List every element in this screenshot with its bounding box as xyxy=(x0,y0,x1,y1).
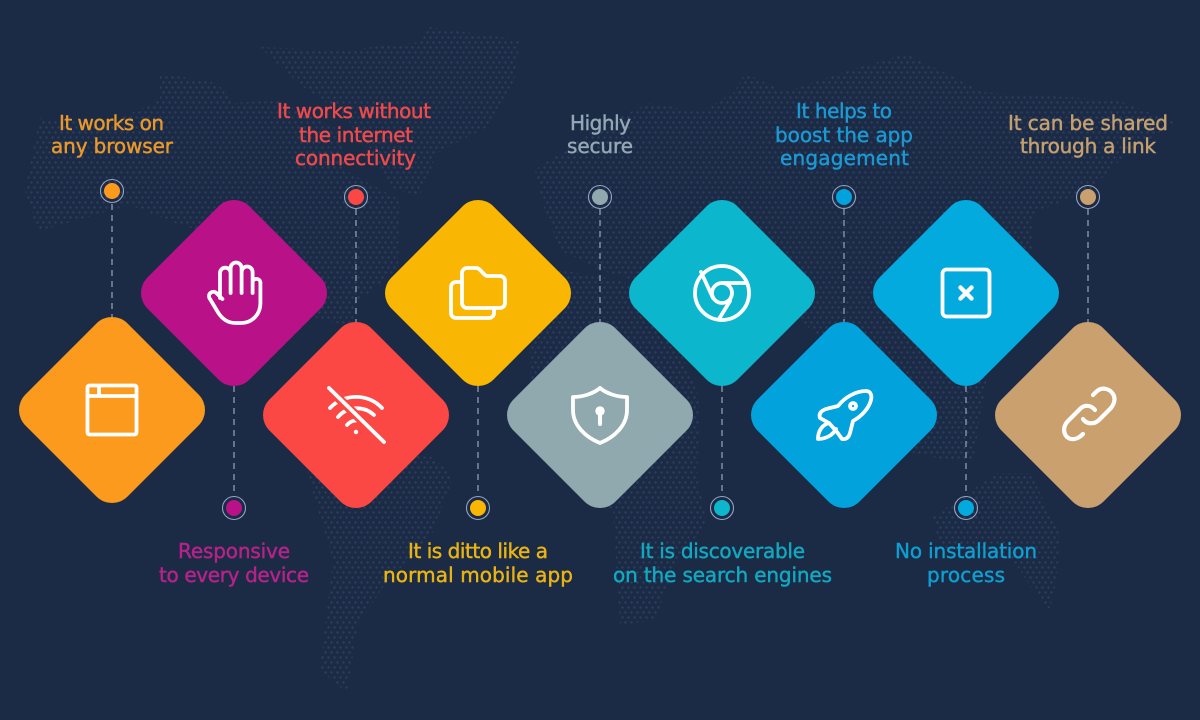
label: highly secure: Highly xyxy=(570,111,631,135)
label: it is ditto like a normal mobile app: normal mobile app xyxy=(383,563,573,587)
label: it helps to boost the app engagement: engagement xyxy=(780,146,909,170)
icon: browser window xyxy=(88,386,136,434)
diamond: blue rocket xyxy=(742,313,946,517)
Australia xyxy=(933,473,1060,610)
label: it works on any browser xyxy=(51,111,174,158)
South America xyxy=(300,440,453,693)
label: it helps to boost the app engagement: boost the app xyxy=(775,123,913,147)
icon: chain link xyxy=(1064,389,1114,439)
marker: red xyxy=(344,186,368,208)
icon: rocket xyxy=(818,391,871,439)
label: responsive to every device xyxy=(159,539,309,587)
diamond: yellow folders xyxy=(376,191,580,395)
label: it works without the internet connectivity: It works without xyxy=(277,99,431,123)
label: no installation process: process xyxy=(927,563,1005,587)
marker: tan xyxy=(1076,186,1100,208)
label: it works without the internet connectivity: the internet xyxy=(299,123,413,147)
connector: dashed lines xyxy=(112,204,1088,497)
label: it is ditto like a normal mobile app xyxy=(383,539,573,587)
icon: chrome logo xyxy=(695,266,749,320)
marker: cyan xyxy=(954,496,978,520)
Africa xyxy=(530,270,707,625)
label: no installation process: No installation xyxy=(895,539,1037,563)
Eurasia xyxy=(535,54,1174,460)
diamond: orange browser xyxy=(10,308,214,512)
marker: yellow xyxy=(466,496,490,520)
label: highly secure: secure xyxy=(567,134,633,158)
icon: wifi off xyxy=(328,388,384,442)
diamond: grey shield xyxy=(498,313,702,517)
marker: blue xyxy=(832,186,856,208)
diamond: teal chrome xyxy=(620,191,824,395)
diamond: tan link xyxy=(986,313,1190,517)
icon: shield with keyhole xyxy=(573,388,627,443)
icon: hand xyxy=(209,263,260,323)
marker: teal xyxy=(710,496,734,520)
icon: close box xyxy=(942,270,990,316)
marker: magenta xyxy=(222,496,246,520)
label: it works on any browser: any browser xyxy=(51,134,174,158)
label: it can be shared through a link: It can be shared xyxy=(1008,111,1168,135)
label: responsive to every device: Responsive xyxy=(178,539,290,563)
diamond: magenta hand xyxy=(132,191,336,395)
label: it works without the internet connectivity: connectivity xyxy=(295,146,416,170)
label: no installation process xyxy=(895,539,1037,587)
label: it helps to boost the app engagement: It helps to xyxy=(796,99,892,123)
diamond: cyan no install xyxy=(864,191,1068,395)
label: responsive to every device: to every device xyxy=(159,563,309,587)
label: it is discoverable on the search engines: It is discoverable xyxy=(640,539,805,563)
label: it can be shared through a link: through a link xyxy=(1020,134,1156,158)
label: it is discoverable on the search engines: on the search engines xyxy=(613,563,832,587)
marker: orange xyxy=(100,180,124,202)
Greenland xyxy=(260,27,520,195)
North America xyxy=(25,73,400,325)
label: it is discoverable on the search engines xyxy=(613,539,832,587)
marker: grey xyxy=(588,186,612,208)
diamond: red no wifi xyxy=(254,313,458,517)
label: it works on any browser: It works on xyxy=(59,111,164,135)
label: it works without the internet connectivity xyxy=(277,99,431,170)
icon: folders xyxy=(451,268,505,318)
label: it can be shared through a link xyxy=(1008,111,1168,158)
label: it is ditto like a normal mobile app: It is ditto like a xyxy=(408,539,548,563)
label: it helps to boost the app engagement xyxy=(775,99,913,170)
label: highly secure xyxy=(567,111,633,158)
